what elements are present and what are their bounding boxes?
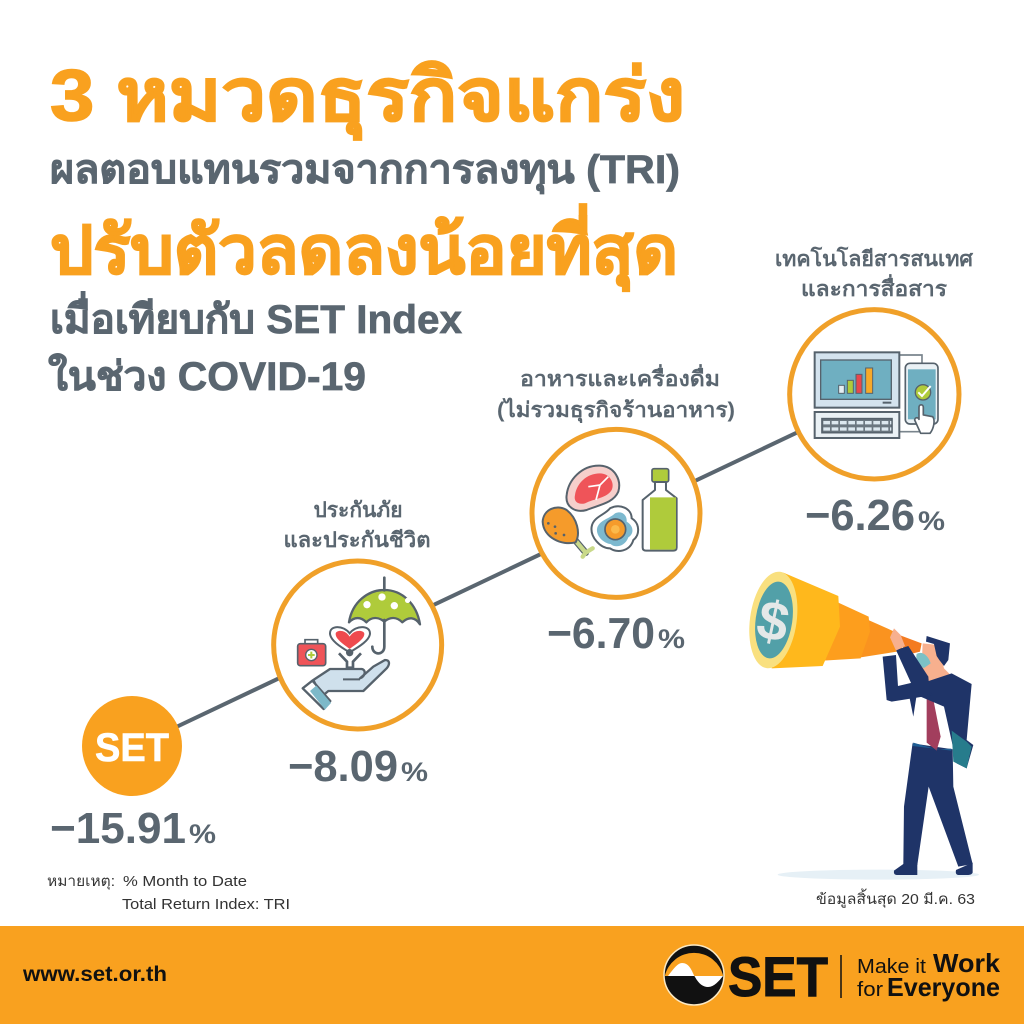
icon: fried egg: [591, 506, 638, 551]
slogan: for: [857, 979, 883, 1001]
icon: first aid kit: [298, 640, 326, 666]
slogan: Everyone: [887, 972, 1000, 1002]
footnote: Total Return Index: TRI: [122, 897, 290, 913]
label: food and beverage: อาหารและเครื่องดื่ม: [520, 363, 720, 391]
trend line: [132, 396, 874, 748]
illustration: businessman with telescope: [743, 569, 979, 880]
SET marker: [82, 696, 182, 796]
SET value: −15.91: [50, 804, 186, 853]
icon: computer: [815, 352, 922, 438]
icon: meat: [566, 466, 619, 511]
value: technology: −6.26: [805, 491, 915, 540]
legs: [903, 743, 973, 867]
icon: smartphone: [905, 363, 938, 433]
value: food and beverage: −6.70: [547, 609, 655, 658]
label: insurance: ประกันภัย: [313, 499, 403, 522]
jacket: [909, 673, 973, 768]
title line: smallest decline: ปรับตัวลดลงน้อยที่สุด: [50, 203, 678, 292]
label: technology: และการสื่อสาร: [801, 273, 948, 301]
shirt: [913, 673, 953, 749]
value: insurance: %: [401, 757, 428, 787]
ground shadow: [778, 870, 979, 880]
SET logo: [664, 945, 828, 1008]
icon: oil bottle: [643, 469, 677, 551]
title block: [48, 56, 685, 399]
icon: hand: [303, 660, 389, 710]
icon: umbrella: [349, 578, 420, 653]
slogan: [857, 948, 1001, 1002]
icon: insurance circle: [274, 561, 442, 729]
title line: 3 categories: 3 หมวดธุรกิจแกร่ง: [50, 56, 685, 141]
label: food and beverage: [497, 363, 735, 424]
slogan: Make it: [857, 956, 926, 978]
value: food and beverage: %: [658, 624, 685, 654]
slogan: Work: [933, 948, 1001, 978]
telescope: $: [752, 587, 795, 654]
footnote: % Month to Date: [123, 874, 247, 890]
label: technology: [775, 246, 974, 301]
footnote: [47, 874, 290, 913]
icon: chicken leg: [543, 508, 593, 557]
footer bar: [0, 926, 1024, 1024]
businessman: [883, 628, 973, 875]
data date note: ข้อมูลสิ้นสุด 20 มี.ค. 63: [816, 888, 975, 908]
label: technology: เทคโนโลยีสารสนเทศ: [775, 246, 974, 271]
arms: [883, 655, 933, 702]
telescope: [743, 569, 922, 671]
SET value: %: [189, 819, 216, 849]
label: food and beverage: (ไม่รวมธุรกิจร้านอาหาร): [497, 397, 735, 424]
SET marker: SET: [95, 726, 169, 770]
label: insurance: และประกันชีวิต: [284, 528, 430, 552]
divider: [840, 955, 842, 998]
label: insurance: [284, 499, 430, 552]
subtitle: compared with SET Index: เมื่อเทียบกับ SET Index: [50, 291, 462, 342]
value: technology: %: [918, 506, 945, 536]
face and hair: [922, 643, 951, 684]
website url: www.set.or.th: [22, 963, 167, 986]
subtitle: total return: ผลตอบแทนรวมจากการลงทุน (TRI): [50, 148, 680, 195]
icon: food circle: [532, 429, 700, 597]
SET logo: SET: [728, 945, 828, 1008]
icon: technology circle: [790, 310, 959, 479]
footnote: หมายเหตุ:: [47, 874, 115, 890]
value: insurance: −8.09: [288, 742, 398, 791]
subtitle: during COVID-19: ในช่วง COVID-19: [48, 353, 366, 399]
icon: heart: [330, 627, 370, 668]
